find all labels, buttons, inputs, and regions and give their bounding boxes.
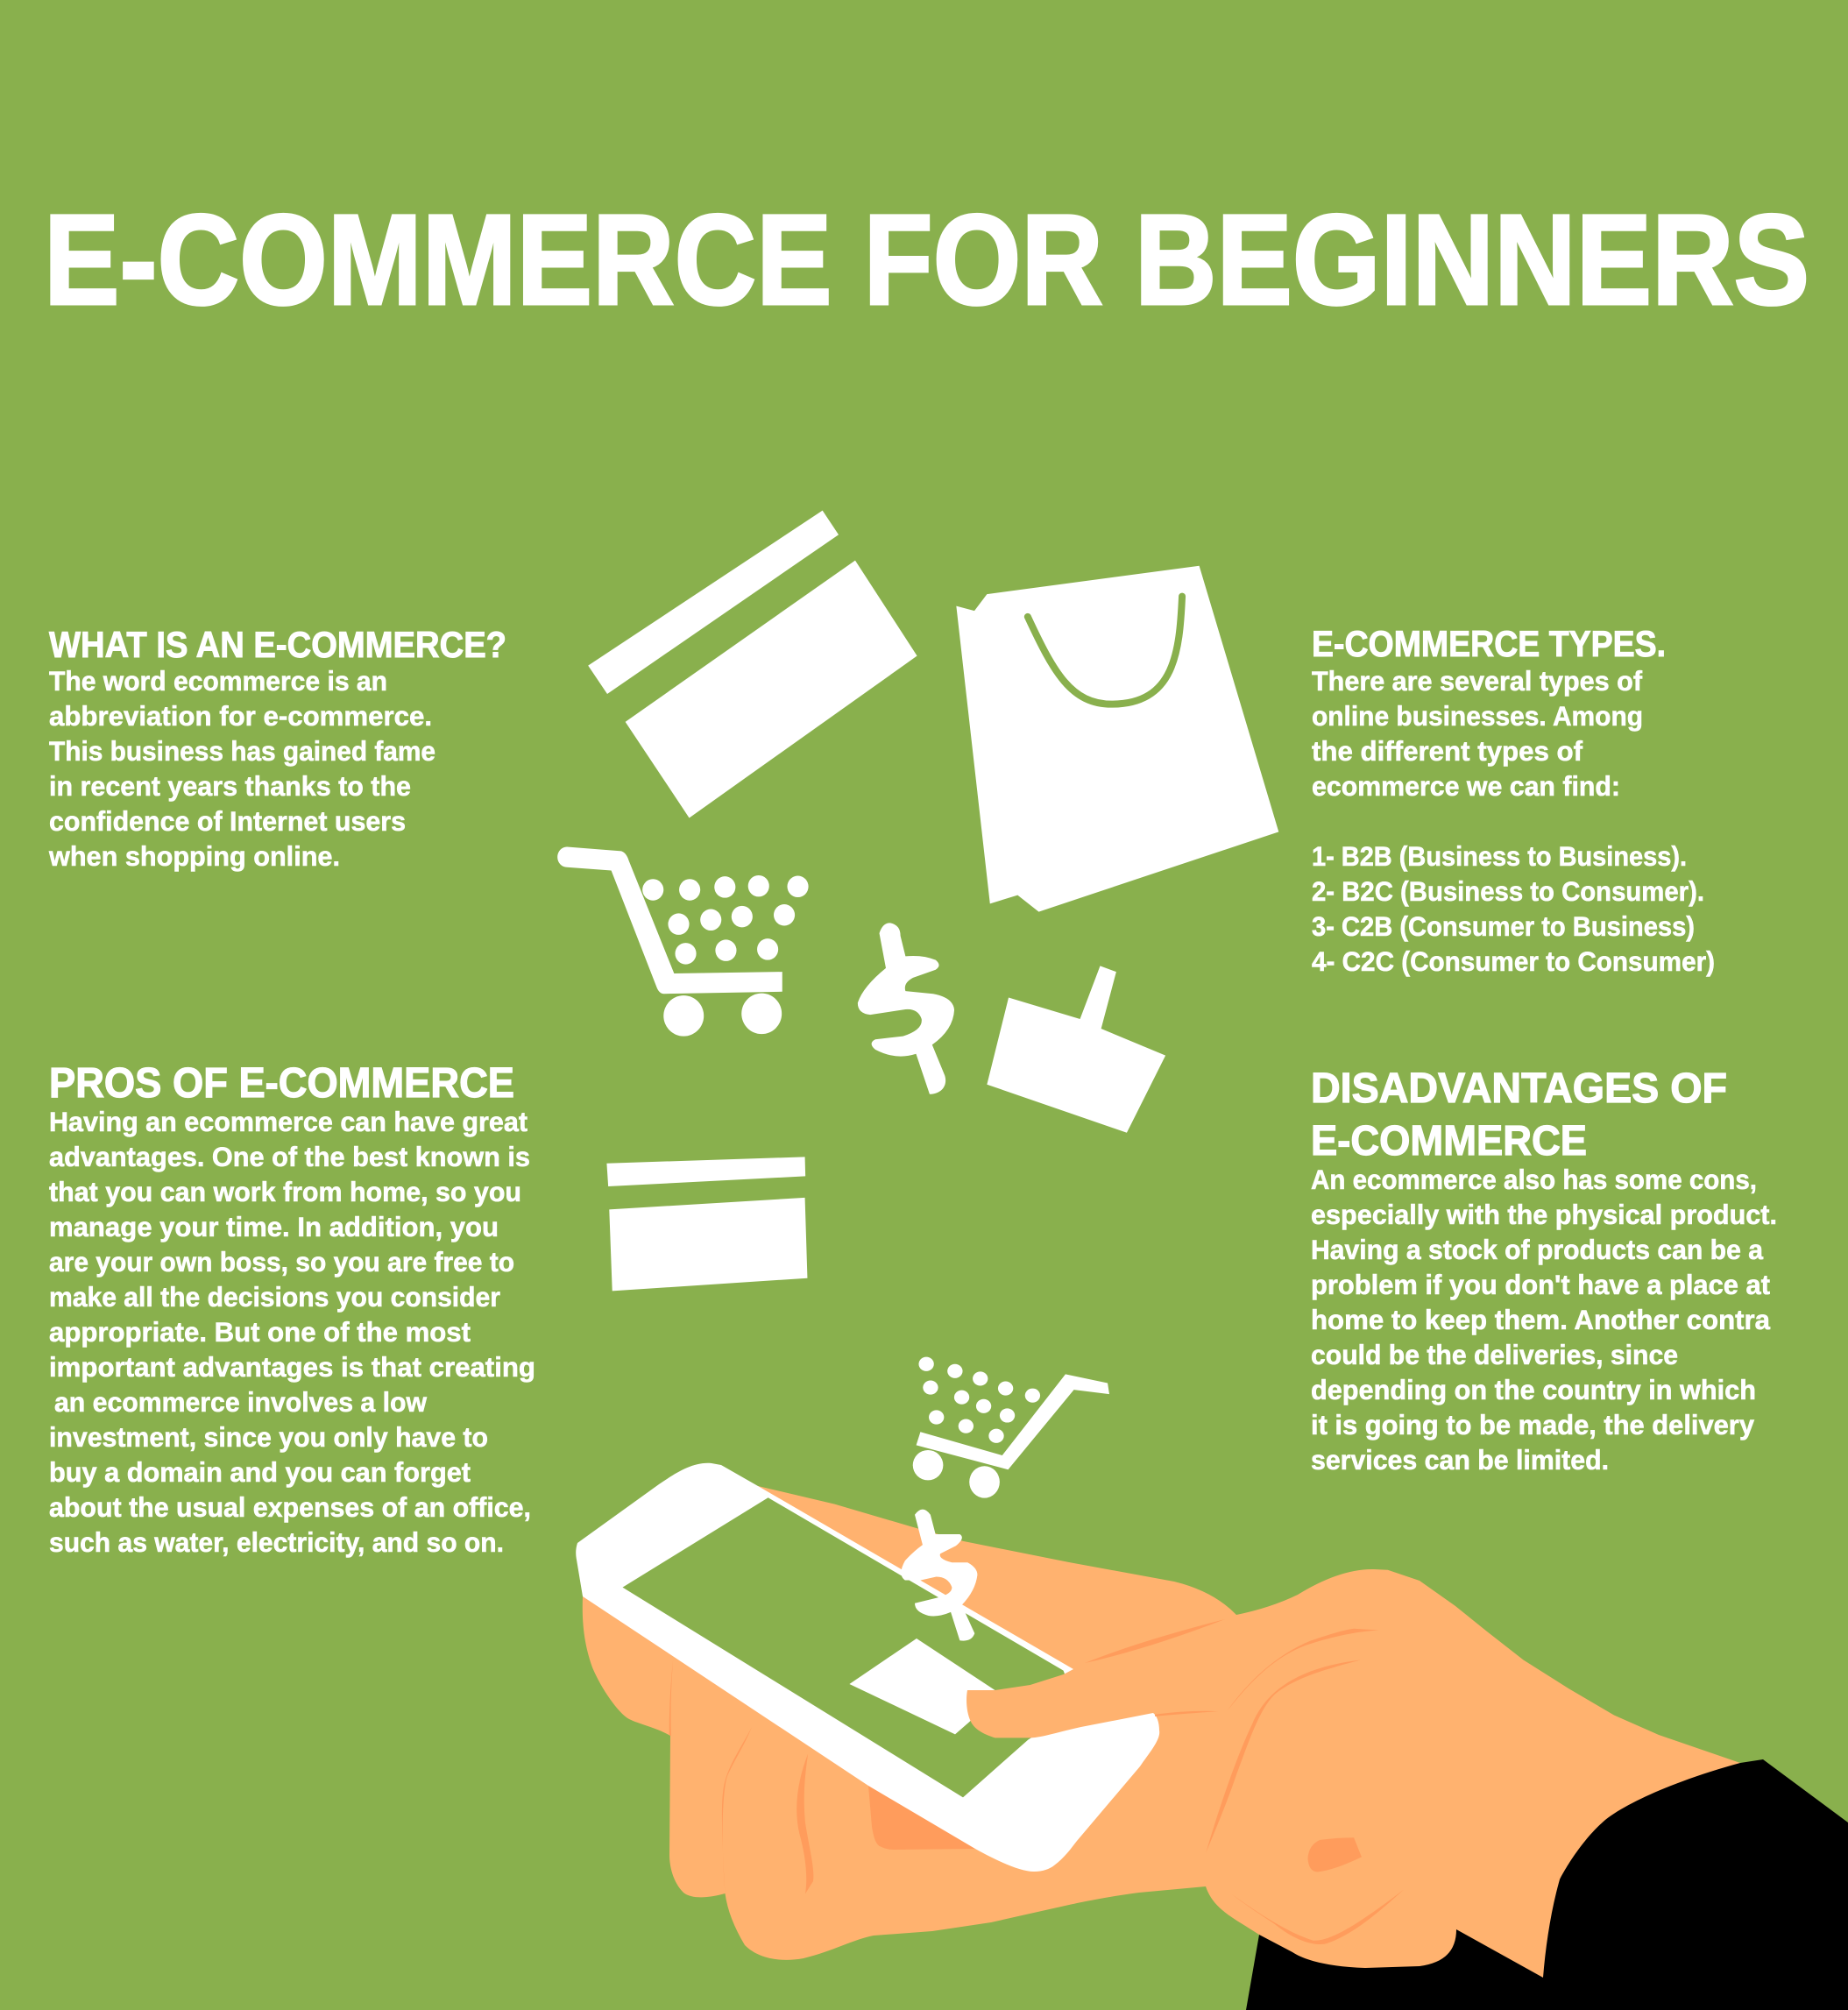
text block: definition: in recent years thanks to the bbox=[49, 770, 411, 802]
icon: basket bbox=[987, 966, 1165, 1133]
back of hand creases bbox=[1155, 1629, 1404, 1944]
text block: definition: The word ecommerce is an bbox=[49, 665, 387, 697]
icon: shopping cart bbox=[557, 847, 809, 1037]
text block: disadvantages: it is going to be made, the delivery bbox=[1311, 1409, 1754, 1440]
text block: pros: about the usual expenses of an office, bbox=[49, 1491, 531, 1523]
panel: e-commerce types bbox=[1312, 623, 1715, 977]
card on screen bbox=[849, 1638, 995, 1734]
phone screen bbox=[622, 1497, 1078, 1797]
finger crease bbox=[1085, 1619, 1225, 1663]
text block: definition: when shopping online. bbox=[48, 840, 340, 872]
list: types bbox=[1312, 840, 1715, 977]
text block: disadvantages bbox=[1311, 1164, 1777, 1476]
icon: small shopping cart bbox=[913, 1357, 1109, 1498]
text block: pros bbox=[49, 1106, 535, 1558]
sleeve bbox=[1246, 1752, 1848, 2010]
text block: types intro: ecommerce we can find: bbox=[1312, 770, 1620, 802]
text block: disadvantages: home to keep them. Another contra bbox=[1311, 1304, 1770, 1335]
text block: pros: investment, since you only have to bbox=[49, 1421, 488, 1453]
text block: disadvantages: problem if you don't have a place at bbox=[1311, 1269, 1770, 1300]
heading: disadvantages of e-commerce: DISADVANTAGES OF bbox=[1311, 1065, 1727, 1112]
list: types: 3- C2B (Consumer to Business) bbox=[1312, 910, 1695, 942]
list: types: 4- C2C (Consumer to Consumer) bbox=[1312, 945, 1715, 977]
text block: disadvantages: could be the deliveries, since bbox=[1311, 1339, 1678, 1370]
icon: flat credit card bbox=[606, 1157, 807, 1291]
text block: definition bbox=[48, 665, 435, 872]
palm shadow bbox=[868, 1786, 975, 1850]
text block: disadvantages: services can be limited. bbox=[1311, 1444, 1609, 1476]
text block: pros: important advantages is that creating bbox=[49, 1351, 535, 1383]
text block: pros: manage your time. In addition, you bbox=[49, 1211, 499, 1242]
text block: definition: This business has gained fame bbox=[49, 735, 435, 767]
heading: what is an e-commerce: WHAT IS AN E-COMMERCE? bbox=[49, 624, 506, 665]
text block: disadvantages: Having a stock of products can be a bbox=[1311, 1234, 1763, 1265]
knuckle spot bbox=[1307, 1837, 1362, 1872]
list: types: 1- B2B (Business to Business). bbox=[1312, 840, 1687, 872]
text block: pros: an ecommerce involves a low bbox=[54, 1386, 427, 1418]
text block: pros: make all the decisions you consider bbox=[49, 1281, 500, 1313]
panel: what is an e-commerce bbox=[48, 624, 506, 872]
text block: types intro: the different types of bbox=[1312, 735, 1582, 767]
heading: pros of e-commerce: PROS OF E-COMMERCE bbox=[49, 1060, 514, 1107]
text block: types intro bbox=[1312, 665, 1643, 802]
heading: e-commerce types: E-COMMERCE TYPES. bbox=[1312, 623, 1666, 664]
icon: shopping bag bbox=[956, 566, 1278, 912]
text block: pros: advantages. One of the best known is bbox=[49, 1141, 530, 1172]
icon: small dollar sign bbox=[901, 1510, 977, 1641]
heading: disadvantages of e-commerce: E-COMMERCE bbox=[1311, 1118, 1587, 1164]
heading: disadvantages of e-commerce bbox=[1311, 1065, 1727, 1164]
text block: pros: such as water, electricity, and so on. bbox=[49, 1526, 504, 1558]
icon: tilted credit card bbox=[588, 511, 917, 817]
text block: pros: Having an ecommerce can have great bbox=[49, 1106, 527, 1137]
text block: disadvantages: An ecommerce also has some cons, bbox=[1311, 1164, 1757, 1195]
text block: definition: confidence of Internet users bbox=[49, 805, 406, 837]
list: types: 2- B2C (Business to Consumer). bbox=[1312, 875, 1704, 907]
pointing finger bbox=[966, 1615, 1244, 1738]
text block: definition: abbreviation for e-commerce. bbox=[49, 700, 432, 732]
text block: pros: are your own boss, so you are free to bbox=[49, 1246, 514, 1277]
icon: dollar sign bbox=[858, 923, 954, 1094]
floating shopping icons bbox=[557, 511, 1278, 1291]
panel: disadvantages bbox=[1311, 1065, 1777, 1476]
finger creases bbox=[669, 1510, 977, 1893]
text block: disadvantages: depending on the country in which bbox=[1311, 1374, 1756, 1405]
text block: disadvantages: especially with the physical product. bbox=[1311, 1199, 1777, 1230]
text block: pros: appropriate. But one of the most bbox=[49, 1316, 471, 1348]
text block: pros: that you can work from home, so you bbox=[49, 1176, 521, 1207]
text block: types intro: There are several types of bbox=[1312, 665, 1642, 697]
text block: types intro: online businesses. Among bbox=[1312, 700, 1643, 732]
hand bbox=[583, 1486, 1740, 1978]
text block: pros: buy a domain and you can forget bbox=[49, 1456, 471, 1488]
panel: pros of e-commerce bbox=[49, 1060, 535, 1558]
phone bbox=[576, 1463, 1159, 1872]
illustration: hand holding phone bbox=[576, 1357, 1848, 2010]
